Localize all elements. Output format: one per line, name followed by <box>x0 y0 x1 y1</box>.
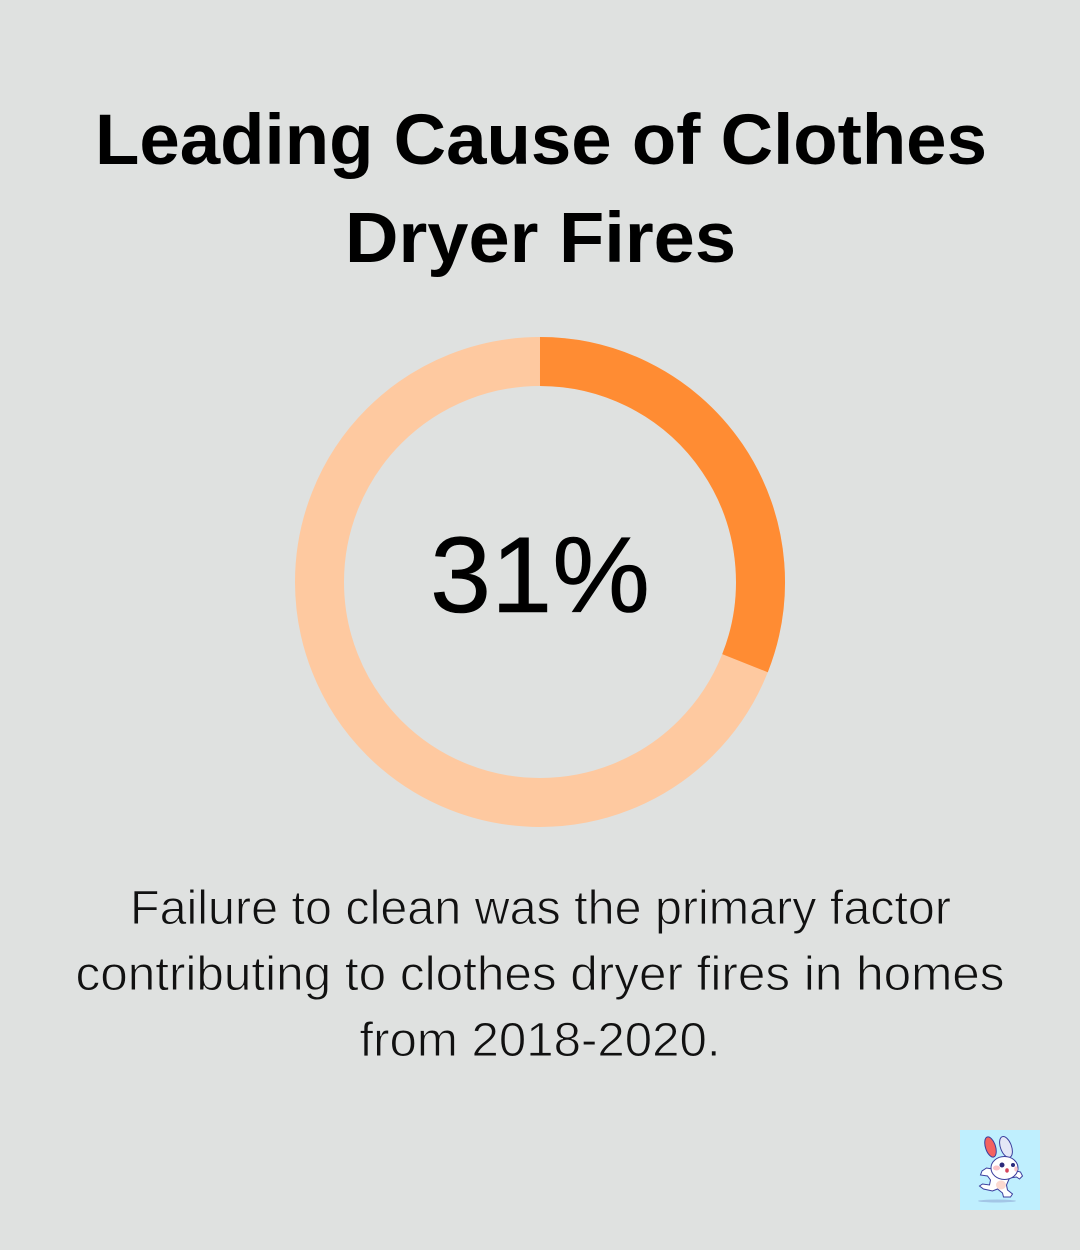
donut chart: 31 percent <box>320 362 760 802</box>
title: Dryer Fires <box>345 199 736 278</box>
title: Leading Cause of Clothes <box>95 101 987 180</box>
rabbit belly <box>996 1180 1006 1190</box>
rabbit shadow <box>978 1200 1016 1202</box>
description text: from 2018-2020. <box>360 1014 720 1067</box>
description text: Failure to clean was the primary factor <box>130 882 951 935</box>
rabbit face <box>993 1162 1018 1173</box>
rabbit figure <box>980 1135 1022 1197</box>
donut value: 31% <box>430 514 650 635</box>
title <box>95 101 987 278</box>
description text <box>76 882 1004 1067</box>
description text: contributing to clothes dryer fires in homes <box>76 948 1004 1001</box>
icon: rabbit logo <box>960 1130 1040 1210</box>
